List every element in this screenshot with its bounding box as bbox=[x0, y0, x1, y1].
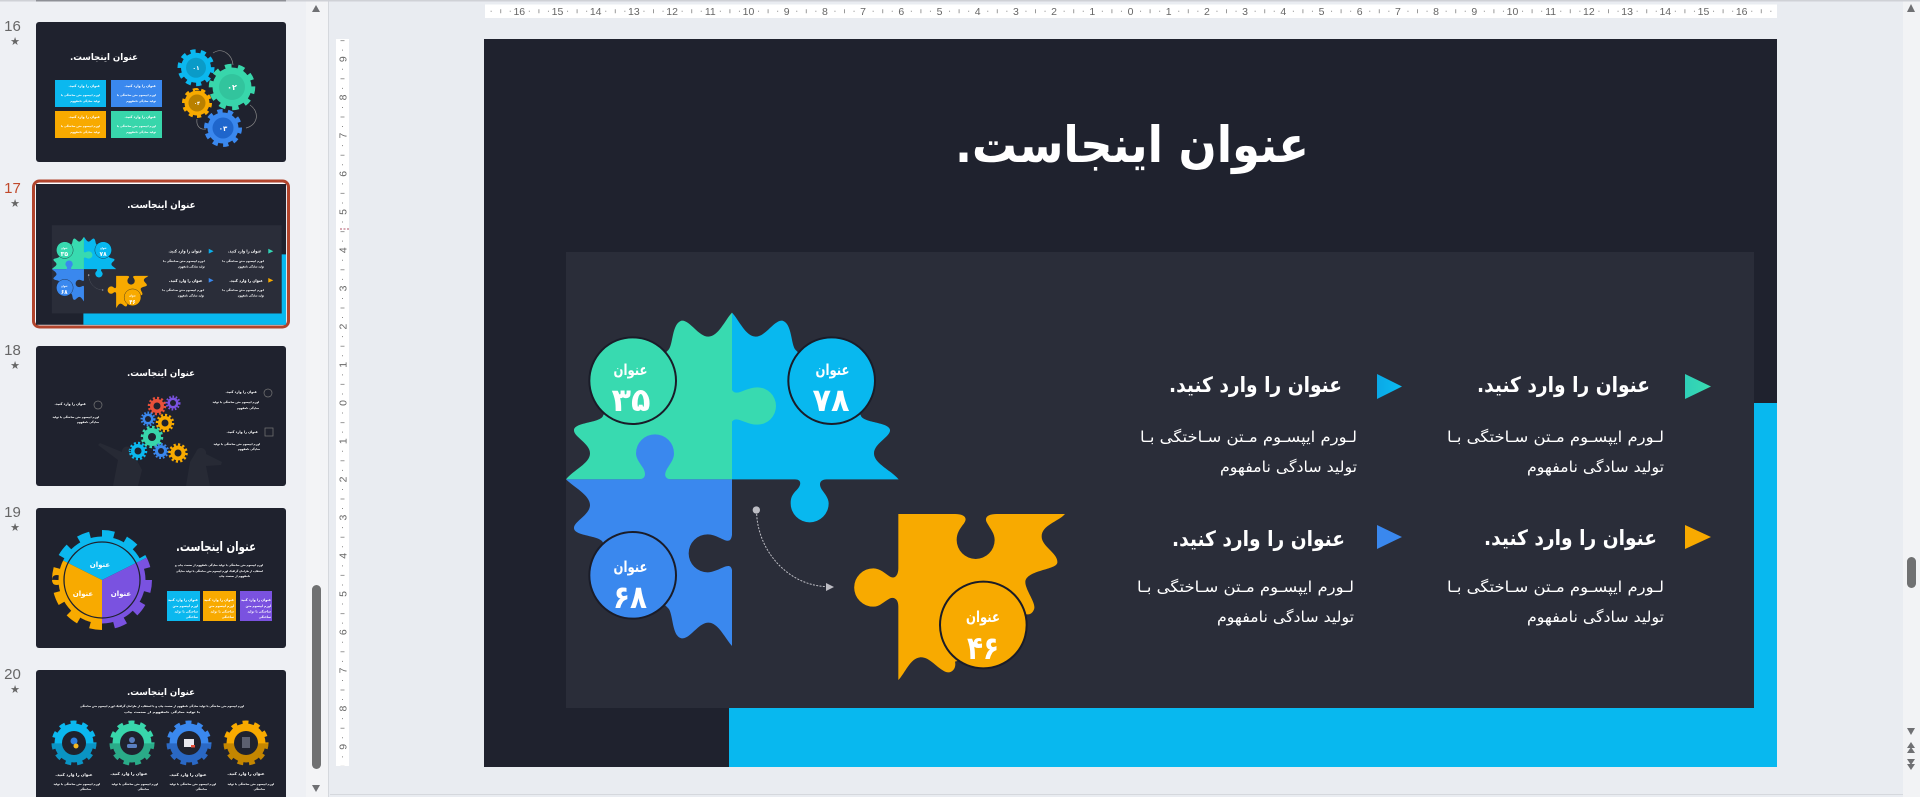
horizontal ruler: 16 bbox=[513, 6, 525, 18]
thumbnail: slide 19: ساختگی با تولید bbox=[174, 610, 198, 614]
thumbnail: slide 20: عنوان را وارد کنید. bbox=[55, 772, 93, 777]
thumbnail: slide 19: عنوان bbox=[111, 590, 131, 598]
vertical ruler: 3 bbox=[338, 515, 350, 521]
thumbnail: slide 17 selected: لـورم ایپسـوم مـتن سـاختگی بـا bbox=[222, 259, 264, 263]
text block: bottom left bbox=[1137, 527, 1354, 626]
puzzle: four pieces with circles bbox=[566, 313, 899, 646]
thumbnail: slide 20: لورم ایپسوم متن ساختگی با تولید سادگی نامفهوم از صنعت چاپ و با استفاده از طراحان گرافیک لورم ایپسوم متن ساختگی bbox=[80, 704, 244, 708]
circle: cyan bbox=[788, 337, 875, 424]
thumbnail: slide 18 bbox=[36, 346, 286, 486]
slide numbers: ★ bbox=[10, 36, 20, 48]
horizontal ruler: 5 bbox=[937, 6, 943, 18]
horizontal ruler: 3 bbox=[1242, 6, 1248, 18]
slide numbers: ★ bbox=[10, 360, 20, 372]
thumbnail: slide 19: لورم ایپسوم متن bbox=[209, 604, 234, 608]
thumbnail: slide 17 selected: تولید سادگی نامفهوم bbox=[238, 294, 264, 298]
text block: top right bbox=[1447, 373, 1664, 476]
slide background bbox=[484, 39, 1777, 767]
puzzle piece: blue bbox=[566, 434, 732, 646]
horizontal ruler: 8 bbox=[1433, 6, 1439, 18]
thumbnail: slide 16: عنوان را وارد کنید. bbox=[68, 115, 100, 119]
vertical ruler: 4 bbox=[338, 553, 350, 559]
horizontal ruler: 4 bbox=[975, 6, 981, 18]
thumbnail: slide 19: عنوان اینجاست. bbox=[176, 540, 256, 555]
thumbnail: slide 19: لورم ایپسوم متن ساختگی با تولید سادگی نامفهوم از صنعت چاپ و bbox=[174, 563, 263, 567]
thumbnail: slide 17 selected: تولید سادگی نامفهوم bbox=[178, 265, 205, 269]
circle labels: عنوان bbox=[816, 361, 850, 379]
thumbnail: slide 16: تولید سادگی نامفهوم bbox=[70, 99, 100, 103]
thumbnail: slide 17 selected: عنوان bbox=[61, 246, 68, 250]
puzzle piece: green bbox=[566, 313, 776, 479]
slide numbers: 20 bbox=[4, 666, 21, 683]
circle labels: عنوان bbox=[614, 558, 648, 576]
thumbnail: slide 16: لورم ایپسوم متن ساختگی با bbox=[117, 124, 156, 128]
thumbnail: slide 19: ساختگی bbox=[259, 615, 271, 619]
thumbnail: slide 16: عنوان اینجاست. bbox=[70, 53, 138, 63]
thumbnail: slide 19: لورم ایپسوم متن bbox=[246, 604, 271, 608]
thumbnail: slide 19: عنوان bbox=[73, 590, 93, 598]
thumbnail: slide 20: لورم ایپسوم متن ساختگی با تولید bbox=[111, 782, 158, 786]
circle labels: عنوان bbox=[614, 361, 648, 379]
thumbnail: slide 18: سادگی نامفهوم bbox=[77, 420, 99, 424]
vertical ruler: 5 bbox=[338, 591, 350, 597]
cyan accent bars bbox=[729, 403, 1777, 767]
thumbnail: slide 17 selected: ۷۸ bbox=[100, 251, 107, 258]
thumbnail: slide 19: عنوان را وارد کنید bbox=[168, 598, 199, 602]
thumbnail: slide 16 bbox=[36, 22, 286, 162]
thumbnail: slide 18: عنوان را وارد کنید. bbox=[226, 390, 257, 394]
slide numbers: ★ bbox=[10, 522, 20, 534]
triangle markers bbox=[1377, 374, 1711, 549]
slide numbers: 18 bbox=[4, 342, 21, 359]
thumbnail: slide 19 bbox=[36, 508, 286, 648]
circle labels: ۶۸ bbox=[613, 578, 647, 616]
thumbnail: slide 17 selected: عنوان اینجاست. bbox=[127, 200, 196, 211]
thumbnail: slide 17 selected: عنوان را وارد کنید. bbox=[168, 248, 202, 253]
text block: top right: لـورم ایپسـوم مـتن سـاختگی بـا bbox=[1447, 428, 1664, 447]
thumbnail: slide 16: ۰۱ bbox=[192, 65, 200, 72]
horizontal ruler: 6 bbox=[898, 6, 904, 18]
circle labels: عنوان bbox=[966, 608, 1000, 626]
circle labels: ۷۸ bbox=[812, 381, 850, 419]
thumbnail: slide 17 selected: عنوان را وارد کنید. bbox=[169, 278, 203, 283]
thumbnail: slide 17 selected: عنوان را وارد کنید. bbox=[229, 278, 263, 283]
vertical ruler: 9 bbox=[338, 56, 350, 62]
text block: bottom left: عنوان را وارد کنید. bbox=[1172, 527, 1345, 551]
thumbnail: slide 17 selected: ۶۸ bbox=[61, 289, 68, 296]
thumbnail: slide 20: ساختگی bbox=[80, 787, 91, 791]
text block: bottom right: عنوان را وارد کنید. bbox=[1484, 526, 1657, 550]
horizontal ruler: 5 bbox=[1319, 6, 1325, 18]
thumbnail: slide 20: عنوان را وارد کنید. bbox=[169, 772, 207, 777]
thumbnail: slide 16: ۰۲ bbox=[227, 83, 237, 92]
thumbnail: slide 17 selected: لـورم ایپسـوم مـتن سـاختگی بـا bbox=[222, 288, 264, 292]
thumbnail: slide 18: عنوان را وارد کنید. bbox=[54, 402, 86, 406]
horizontal ruler: 7 bbox=[860, 6, 866, 18]
thumbnail: slide 16: ۰۳ bbox=[219, 125, 228, 133]
horizontal ruler: 8 bbox=[822, 6, 828, 18]
horizontal ruler: 0 bbox=[1128, 6, 1134, 18]
thumbnail: slide 17 selected: لـورم ایپسـوم مـتن سـاختگی بـا bbox=[163, 259, 205, 263]
horizontal ruler: 7 bbox=[1395, 6, 1401, 18]
thumbnail: slide 18: عنوان را وارد کنید. bbox=[226, 430, 258, 434]
horizontal ruler: 14 bbox=[590, 6, 602, 18]
horizontal ruler bbox=[485, 4, 1777, 18]
thumbnail: slide 16: ۰۴ bbox=[194, 101, 200, 107]
vertical ruler: 2 bbox=[338, 324, 350, 330]
vertical ruler: 1 bbox=[338, 362, 350, 368]
text block: top left: لـورم ایپسـوم مـتن سـاختگی بـا bbox=[1140, 428, 1357, 447]
circle labels bbox=[612, 361, 1000, 667]
shapes: panel, bars, triangles, puzzle bbox=[566, 252, 1777, 767]
text block: top left bbox=[1140, 373, 1357, 476]
thumbnail: slide 17 selected: لـورم ایپسـوم مـتن سـاختگی بـا bbox=[162, 288, 204, 292]
thumbnail: slide 16: عنوان را وارد کنید. bbox=[124, 115, 156, 119]
thumbnail: slide 19: ساختگی با تولید bbox=[210, 610, 234, 614]
thumbnail: slide 20: ساختگی bbox=[196, 787, 207, 791]
slide numbers bbox=[4, 18, 21, 696]
content panel bbox=[566, 252, 1754, 708]
thumbnail: slide 20: عنوان را وارد کنید. bbox=[110, 771, 148, 776]
thumbnail: slide 20: عنوان اینجاست. bbox=[127, 688, 195, 698]
thumbnail: slide 16: عنوان را وارد کنید. bbox=[68, 84, 100, 88]
thumbnail: slide 18: لورم ایپسوم متن ساختگی با تولید bbox=[212, 400, 259, 404]
vertical ruler: 6 bbox=[338, 629, 350, 635]
thumbnail: slide 18: سادگی نامفهوم bbox=[237, 406, 259, 410]
text block: top left: عنوان را وارد کنید. bbox=[1169, 373, 1342, 397]
slide numbers: 19 bbox=[4, 504, 21, 521]
text block: top left: تولید سادگی نامفهوم bbox=[1220, 458, 1357, 476]
sidebar scrollbar bbox=[312, 5, 321, 792]
thumbnail: slide 20: لورم ایپسوم متن ساختگی با تولید bbox=[169, 782, 216, 786]
thumbnail: slide 20: با تولید سادگی نامفهوم از صنعت چاپ bbox=[124, 710, 200, 714]
thumbnail: slide 19: ساختگی bbox=[222, 615, 234, 619]
thumbnail: slide 20: عنوان را وارد کنید. bbox=[227, 771, 265, 776]
horizontal ruler: 2 bbox=[1204, 6, 1210, 18]
thumbnail: slide 17 selected: ۳۵ bbox=[61, 251, 68, 258]
horizontal ruler: 6 bbox=[1357, 6, 1363, 18]
slide bbox=[484, 39, 1777, 767]
vertical ruler: 2 bbox=[338, 476, 350, 482]
thumbnail: slide 18: لورم ایپسوم متن ساختگی با تولید bbox=[52, 415, 99, 419]
thumbnail: slide 17 selected bbox=[34, 181, 288, 327]
thumbnail: slide 20: لورم ایپسوم متن ساختگی با تولید bbox=[227, 782, 274, 786]
vertical ruler: 0 bbox=[338, 400, 350, 406]
thumbnail: slide 20: ساختگی bbox=[138, 787, 149, 791]
vertical ruler: 7 bbox=[338, 133, 350, 139]
thumbnail: slide 19: لورم ایپسوم متن bbox=[173, 604, 198, 608]
thumbnail: slide 17 selected: عنوان bbox=[61, 284, 68, 288]
circle labels: ۳۵ bbox=[612, 381, 650, 419]
horizontal ruler: 9 bbox=[1471, 6, 1477, 18]
vertical ruler: 4 bbox=[338, 247, 350, 253]
text block: bottom left: تولید سادگی نامفهوم bbox=[1217, 608, 1354, 626]
text block: bottom right bbox=[1447, 526, 1664, 626]
vertical ruler: 7 bbox=[338, 667, 350, 673]
horizontal ruler: 3 bbox=[1013, 6, 1019, 18]
horizontal ruler: 11 bbox=[705, 6, 716, 18]
thumbnail: slide 19: عنوان bbox=[90, 561, 110, 569]
vertical ruler: 3 bbox=[338, 285, 350, 291]
text block: top right: عنوان را وارد کنید. bbox=[1477, 373, 1650, 397]
thumbnail: slide 20: لورم ایپسوم متن ساختگی با تولید bbox=[53, 782, 100, 786]
thumbnail: slide 19: عنوان را وارد کنید bbox=[204, 598, 235, 602]
thumbnail: slide 19: ساختگی با تولید bbox=[247, 610, 271, 614]
slide numbers: ★ bbox=[10, 684, 20, 696]
thumbnail: slide 16: تولید سادگی نامفهوم bbox=[126, 130, 156, 134]
vertical ruler: 5 bbox=[338, 209, 350, 215]
thumbnail: slide 18: عنوان اینجاست. bbox=[127, 369, 195, 379]
slide numbers: 17 bbox=[4, 180, 21, 197]
thumbnail: slide 20: ساختگی bbox=[254, 787, 265, 791]
text block: bottom right: تولید سادگی نامفهوم bbox=[1527, 608, 1664, 626]
horizontal ruler: 12 bbox=[1583, 6, 1595, 18]
vertical ruler: 8 bbox=[338, 94, 350, 100]
text block: top right: تولید سادگی نامفهوم bbox=[1527, 458, 1664, 476]
text block: bottom left: لـورم ایپسـوم مـتن سـاختگی بـا bbox=[1137, 578, 1354, 597]
vertical ruler: 9 bbox=[338, 744, 350, 750]
thumbnail: slide 16: تولید سادگی نامفهوم bbox=[70, 130, 100, 134]
thumbnail: slide 19: نامفهوم از صنعت چاپ bbox=[219, 574, 250, 578]
thumbnail: slide 20 bbox=[36, 670, 286, 797]
horizontal ruler: 10 bbox=[1507, 6, 1518, 18]
thumbnail: slide 17 selected: تولید سادگی نامفهوم bbox=[238, 265, 264, 269]
vertical ruler bbox=[336, 39, 350, 766]
horizontal ruler: 12 bbox=[666, 6, 678, 18]
vertical ruler: 8 bbox=[338, 706, 350, 712]
horizontal ruler: 9 bbox=[784, 6, 790, 18]
thumbnail: slide 19: عنوان را وارد کنید bbox=[241, 598, 272, 602]
horizontal ruler: 1 bbox=[1089, 6, 1095, 18]
thumbnail: slide 19: استفاده از طراحان گرافیک لورم ایپسوم متن ساختگی با تولید سادگی bbox=[176, 569, 263, 573]
vertical ruler: 1 bbox=[338, 438, 350, 444]
thumbnail: slide 17 selected: تولید سادگی نامفهوم bbox=[178, 294, 204, 298]
horizontal ruler: 16 bbox=[1736, 6, 1748, 18]
thumbnail: slide 16: عنوان را وارد کنید. bbox=[124, 84, 156, 88]
slide numbers: ★ bbox=[10, 198, 20, 210]
thumbnail: slide 18: سادگی نامفهوم bbox=[238, 447, 260, 451]
vertical ruler: 6 bbox=[338, 171, 350, 177]
circle: green bbox=[589, 337, 676, 424]
thumbnail: slide 18: لورم ایپسوم متن ساختگی با تولید bbox=[213, 442, 260, 446]
thumbnail: slide 17 selected: عنوان bbox=[100, 246, 107, 250]
thumbnail: slide 19: ساختگی bbox=[186, 615, 198, 619]
horizontal ruler: 13 bbox=[628, 6, 640, 18]
circle labels: ۴۶ bbox=[967, 629, 999, 667]
horizontal ruler: 15 bbox=[552, 6, 563, 18]
thumbnail: slide 16: لورم ایپسوم متن ساختگی با bbox=[117, 93, 156, 97]
horizontal ruler: 13 bbox=[1621, 6, 1633, 18]
slide numbers: 16 bbox=[4, 18, 21, 35]
horizontal ruler: 11 bbox=[1545, 6, 1556, 18]
horizontal ruler: 2 bbox=[1051, 6, 1057, 18]
horizontal ruler: 1 bbox=[1166, 6, 1172, 18]
text block: bottom right: لـورم ایپسـوم مـتن سـاختگی بـا bbox=[1447, 578, 1664, 597]
thumbnail: slide 17 selected: ۴۶ bbox=[129, 299, 136, 306]
thumbnail: slide 17 selected: عنوان bbox=[129, 294, 136, 298]
puzzle piece: orange bbox=[854, 514, 1065, 680]
arrow: dashed curve bbox=[753, 506, 834, 591]
horizontal ruler: 15 bbox=[1698, 6, 1709, 18]
horizontal ruler: 10 bbox=[743, 6, 754, 18]
thumbnail: slide 16: تولید سادگی نامفهوم bbox=[126, 99, 156, 103]
title: عنوان اینجاست. bbox=[955, 116, 1309, 175]
horizontal ruler: 4 bbox=[1280, 6, 1286, 18]
horizontal ruler: 14 bbox=[1659, 6, 1671, 18]
thumbnail: slide 17 selected: عنوان را وارد کنید. bbox=[228, 248, 262, 253]
thumbnail: slide 16: لورم ایپسوم متن ساختگی با bbox=[61, 93, 100, 97]
circle: blue bbox=[589, 532, 676, 619]
thumbnail: slide 16: لورم ایپسوم متن ساختگی با bbox=[61, 124, 100, 128]
right scrollbar bbox=[1907, 4, 1916, 770]
puzzle piece: cyan bbox=[732, 313, 899, 522]
